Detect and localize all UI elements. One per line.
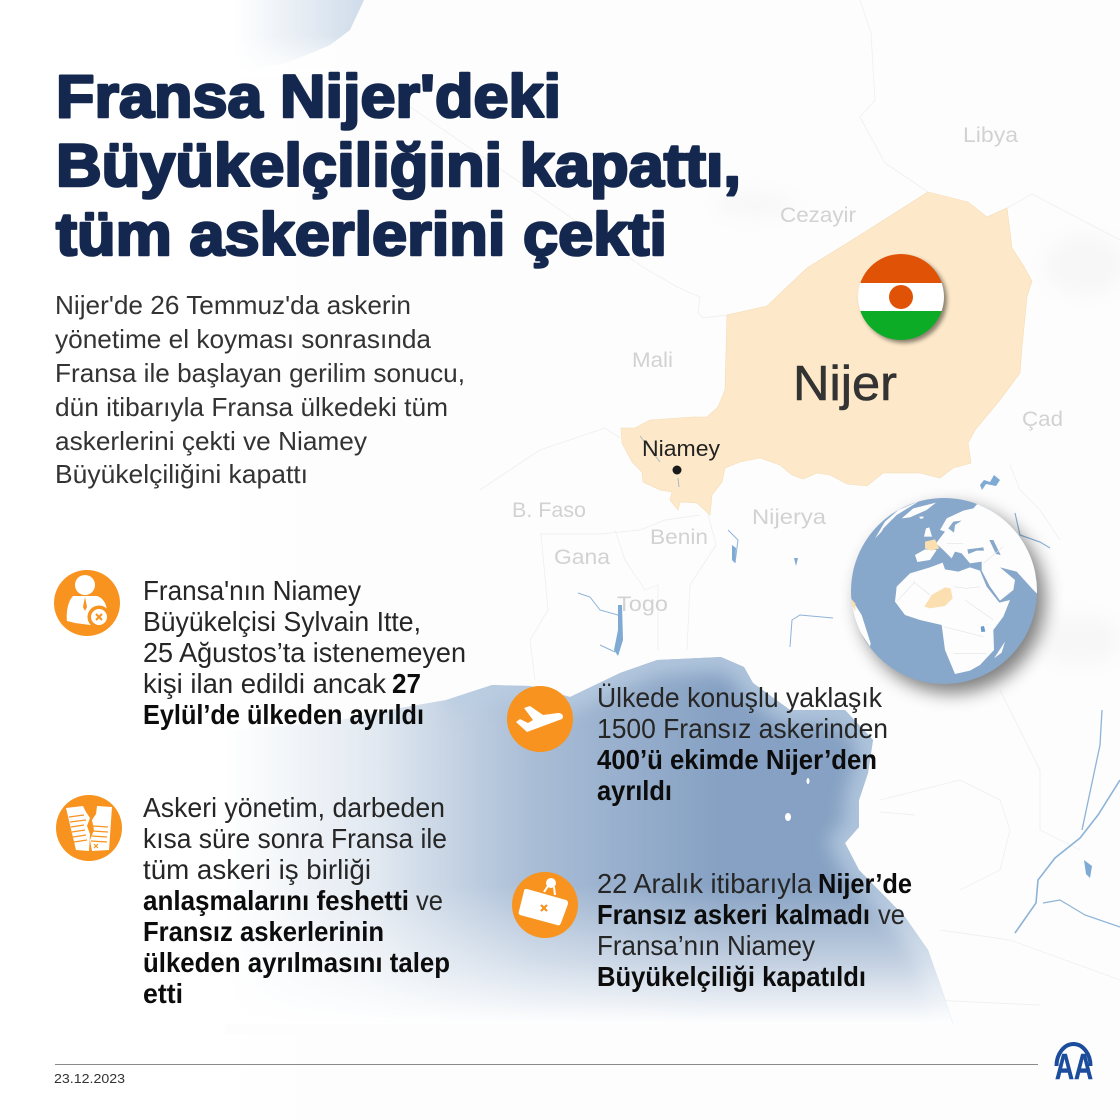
Gulf of Guinea [272, 657, 953, 1024]
map: Niger country shape [621, 192, 1032, 515]
map background [257, 0, 1120, 1024]
Iberia [915, 549, 937, 562]
map labels: Benin [650, 526, 708, 549]
intro text: Nijer'de 26 Temmuz'da askerin [55, 290, 411, 320]
Greenland [902, 503, 936, 518]
text: Nijer’de [818, 868, 912, 899]
text [597, 682, 888, 806]
map labels: Nijerya [752, 506, 826, 529]
map labels: B. Faso [512, 499, 586, 522]
text [597, 868, 912, 992]
text [143, 792, 450, 1009]
map labels: Togo [617, 593, 668, 616]
title: Büyükelçiliğini kapattı, [56, 132, 741, 199]
text: tüm askeri iş birliği [143, 854, 371, 885]
text [143, 575, 466, 730]
map labels: Cezayir [780, 204, 856, 227]
map labels [512, 124, 1063, 616]
title: tüm askerlerini çekti [56, 201, 667, 268]
text: ülkeden ayrılmasını talep [143, 947, 450, 978]
intro text: Fransa ile başlayan gerilim sonucu, [55, 358, 465, 388]
Africa [895, 563, 1010, 674]
icon: briefcase with x [512, 872, 578, 938]
Iceland [919, 517, 924, 519]
text: 22 Aralık itibarıyla [597, 868, 812, 899]
icon: torn document [56, 795, 122, 861]
text: ayrıldı [597, 775, 672, 806]
France highlight [925, 539, 939, 551]
South America [851, 598, 871, 646]
text: Askeri yönetim, darbeden [143, 792, 445, 823]
map labels: Libya [963, 124, 1018, 147]
map labels: Mali [632, 349, 673, 372]
text: Fransız askeri kalmadı [597, 899, 870, 930]
Eurasia [936, 504, 1037, 600]
text: Fransa’nın Niamey [597, 930, 815, 961]
seas on Eurasia [967, 547, 984, 554]
item: embassy closed [512, 868, 912, 992]
terrain texture [715, 193, 1120, 665]
text: kişi ilan edildi ancak [143, 668, 387, 699]
text: 400’ü ekimde Nijer’den [597, 744, 877, 775]
date: 23.12.2023 [54, 1072, 125, 1086]
icon: person with x [54, 570, 120, 636]
logo: AA: AA [1055, 1046, 1093, 1087]
text: anlaşmalarını feshetti [143, 885, 409, 916]
item: ambassador [54, 570, 466, 730]
map labels: Gana [554, 546, 610, 569]
text: Ülkede konuşlu yaklaşık [597, 682, 883, 713]
intro text: yönetime el koyması sonrasında [55, 324, 432, 354]
text: 1500 Fransız askerinden [597, 713, 888, 744]
intro text [55, 290, 465, 489]
map labels: Nijer [793, 357, 897, 411]
footer line [55, 1064, 1038, 1065]
Atlantic at top left [235, 0, 364, 77]
Niamey dot [672, 466, 682, 474]
icon: Niger flag [855, 250, 947, 344]
Britain [924, 527, 932, 537]
Niger highlight [924, 587, 953, 608]
map labels: Çad [1022, 408, 1063, 431]
text: ve [416, 885, 443, 916]
text: kısa süre sonra Fransa ile [143, 823, 447, 854]
text: 27 [392, 668, 421, 699]
intro text: askerlerini çekti ve Niamey [55, 426, 367, 456]
title: Fransa Nijer'deki [56, 63, 561, 130]
rivers and lakes [578, 513, 1120, 933]
North America [875, 501, 920, 538]
Niamey river [640, 436, 679, 487]
text: Büyükelçiliği kapatıldı [597, 961, 866, 992]
text: 25 Ağustos’ta istenemeyen [143, 637, 466, 668]
item: torn agreements [56, 792, 450, 1009]
icon: plane departing [507, 686, 573, 752]
Madagascar [994, 642, 1005, 658]
text: Fransa'nın Niamey [143, 575, 361, 606]
item: 400 soldiers [507, 682, 888, 806]
map labels: Niamey [642, 436, 720, 461]
intro text: dün itibarıyla Fransa ülkedeki tüm [55, 392, 448, 422]
title [56, 63, 741, 268]
text: Fransız askerlerinin [143, 916, 384, 947]
borders [400, 0, 1120, 1005]
text: etti [143, 978, 183, 1009]
text: Büyükelçisi Sylvain Itte, [143, 606, 421, 637]
globe [847, 493, 1050, 693]
text: Eylül’de ülkeden ayrıldı [143, 699, 424, 730]
intro text: Büyükelçiliğini kapattı [55, 459, 308, 489]
text: ve [878, 899, 905, 930]
